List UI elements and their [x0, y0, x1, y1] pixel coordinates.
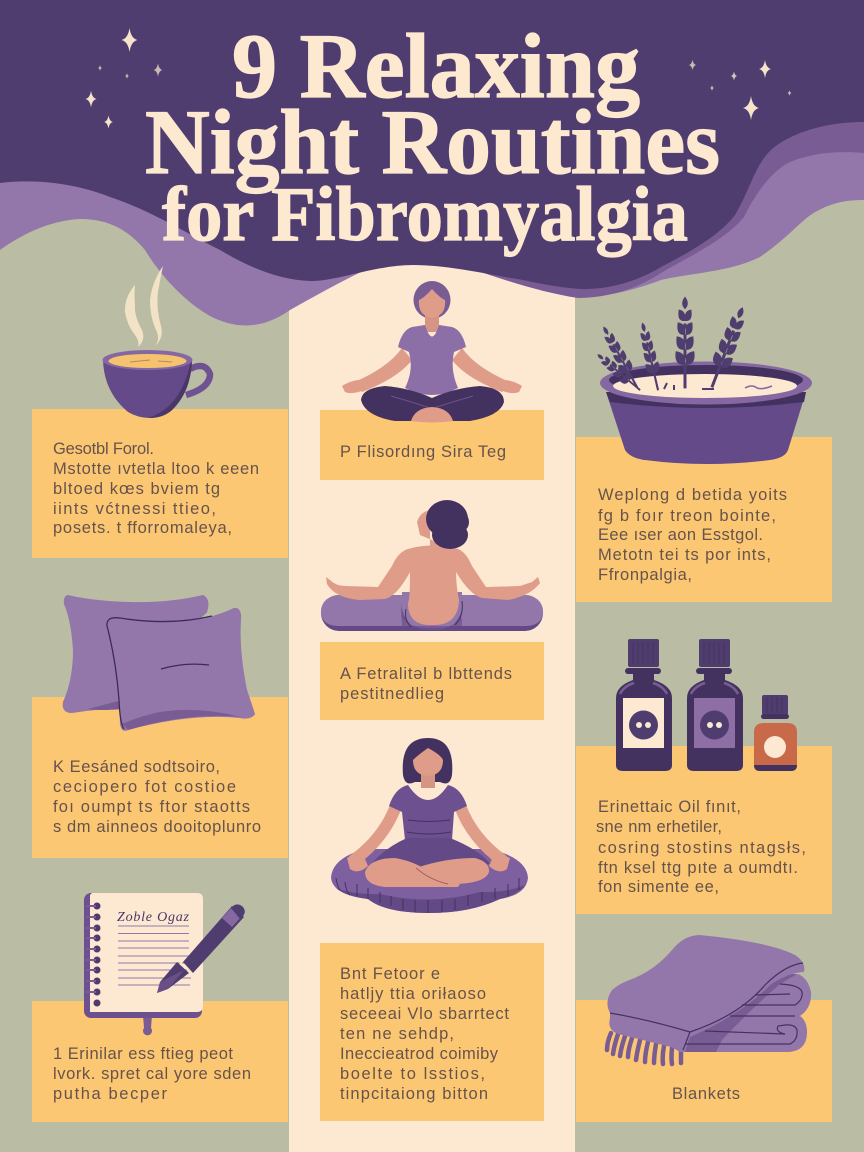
text card: bath: Ffronpalgia, — [598, 566, 692, 584]
text card: blankets: Blankets — [672, 1085, 740, 1103]
panel: blankets — [576, 935, 832, 1122]
text card: floor cushion — [320, 943, 544, 1121]
text card: floor cushion: boelte to lsstios, — [340, 1065, 485, 1083]
title — [145, 15, 720, 257]
text card: essential oils — [576, 746, 832, 914]
text card: pillows: ceciopero fot costioe — [53, 778, 236, 796]
text card: essential oils: fon simente ee, — [598, 878, 719, 896]
text card: pillows: K Eesáned sodtsoiro, — [53, 758, 220, 776]
text card: essential oils: sne nm erhetiler, — [596, 818, 722, 836]
text card: stretch: pestitnedlieg — [340, 685, 444, 703]
text card: tea: iints vćtnessi ttieo, — [53, 500, 216, 518]
text card: blankets — [576, 1000, 832, 1122]
icon: steaming cup — [102, 266, 210, 418]
text card: journal: lvork. spret cal yore sden — [53, 1065, 251, 1083]
text card: floor cushion: Ineccieatrod coimiby — [340, 1045, 499, 1063]
text card: floor cushion: seceeai Vlo sbarrtect — [340, 1005, 509, 1023]
text card: essential oils: cosring stostins ntagsłs, — [598, 839, 806, 857]
text card: floor cushion: tinpcitaiong bitton — [340, 1085, 488, 1103]
text card: stretch: A Fetralitəl b lbttends — [340, 665, 512, 683]
illustration: woman sitting on cushion — [331, 738, 528, 913]
text card: bath: Metotn tei ts por ints, — [598, 546, 771, 564]
icon: small orange bottle — [754, 695, 797, 771]
icon: oil bottle 2 — [687, 639, 743, 771]
title: Night Routines — [145, 91, 720, 193]
decorative stars — [85, 28, 791, 129]
title: for Fibromyalgia — [162, 171, 688, 257]
panel: journal — [32, 893, 288, 1122]
text card: journal — [32, 1001, 288, 1122]
icon: oil bottle 1 — [616, 639, 672, 771]
text card: tea: Mstotte ıvtetla ltoo k eeen — [53, 460, 259, 478]
text card: pillows — [32, 697, 288, 858]
text card: essential oils: Erinettaic Oil fınıt, — [598, 798, 741, 816]
center column — [289, 250, 575, 1152]
illustration: seated meditator — [342, 281, 522, 422]
icon: folded blankets — [607, 935, 811, 1064]
text card: floor cushion: hatljy ttia oriłaoso — [340, 985, 486, 1003]
text card: floor cushion: Bnt Fetoor e — [340, 965, 440, 983]
panel: bath — [576, 297, 832, 602]
text card: floor cushion: ten ne sehdp, — [340, 1025, 454, 1043]
text card: journal: putha becper — [53, 1085, 168, 1103]
text card: tea: Gesotbl Forol. — [53, 440, 154, 458]
header waves — [0, 0, 864, 325]
text card: tea — [32, 409, 288, 558]
text card: bath: Eee ıser aon Esstgol. — [598, 526, 763, 544]
text card: tea: posets. t fforromaleya, — [53, 519, 232, 537]
panel: tea — [32, 266, 288, 558]
text card: essential oils: ftn ksel ttg pıte a oumdtı. — [598, 859, 798, 877]
panel: meditation — [320, 281, 544, 480]
text card: bath: Weplong d betida yoits — [598, 486, 787, 504]
text card: pillows: s dm ainneos dooitoplunro — [53, 818, 261, 836]
panel: essential oils — [576, 639, 832, 914]
title: 9 Relaxing — [232, 15, 640, 117]
icon: bath bowl with lavender — [594, 297, 812, 464]
text card: stretch — [320, 642, 544, 720]
icon: pillows — [64, 596, 254, 730]
text card: meditation: P Flisordıng Sira Teg — [340, 443, 506, 461]
icon: notebook and pen: Zoble Ogaz — [117, 910, 190, 925]
text card: bath — [576, 437, 832, 602]
text card: journal: 1 Erinilar ess ftieg peot — [53, 1045, 233, 1063]
panel: pillows — [32, 596, 288, 858]
text card: meditation — [320, 410, 544, 480]
text card: tea: bltoed kœs bviem tg — [53, 480, 220, 498]
panel: floor cushion — [320, 738, 544, 1121]
illustration: person stretching, seen from behind — [321, 500, 543, 631]
text card: pillows: foı oumpt ts ftor staotts — [53, 798, 250, 816]
icon: notebook and pen — [84, 893, 245, 1035]
text card: bath: fg b foır treon bointe, — [598, 507, 776, 525]
panel: stretch — [320, 500, 544, 720]
